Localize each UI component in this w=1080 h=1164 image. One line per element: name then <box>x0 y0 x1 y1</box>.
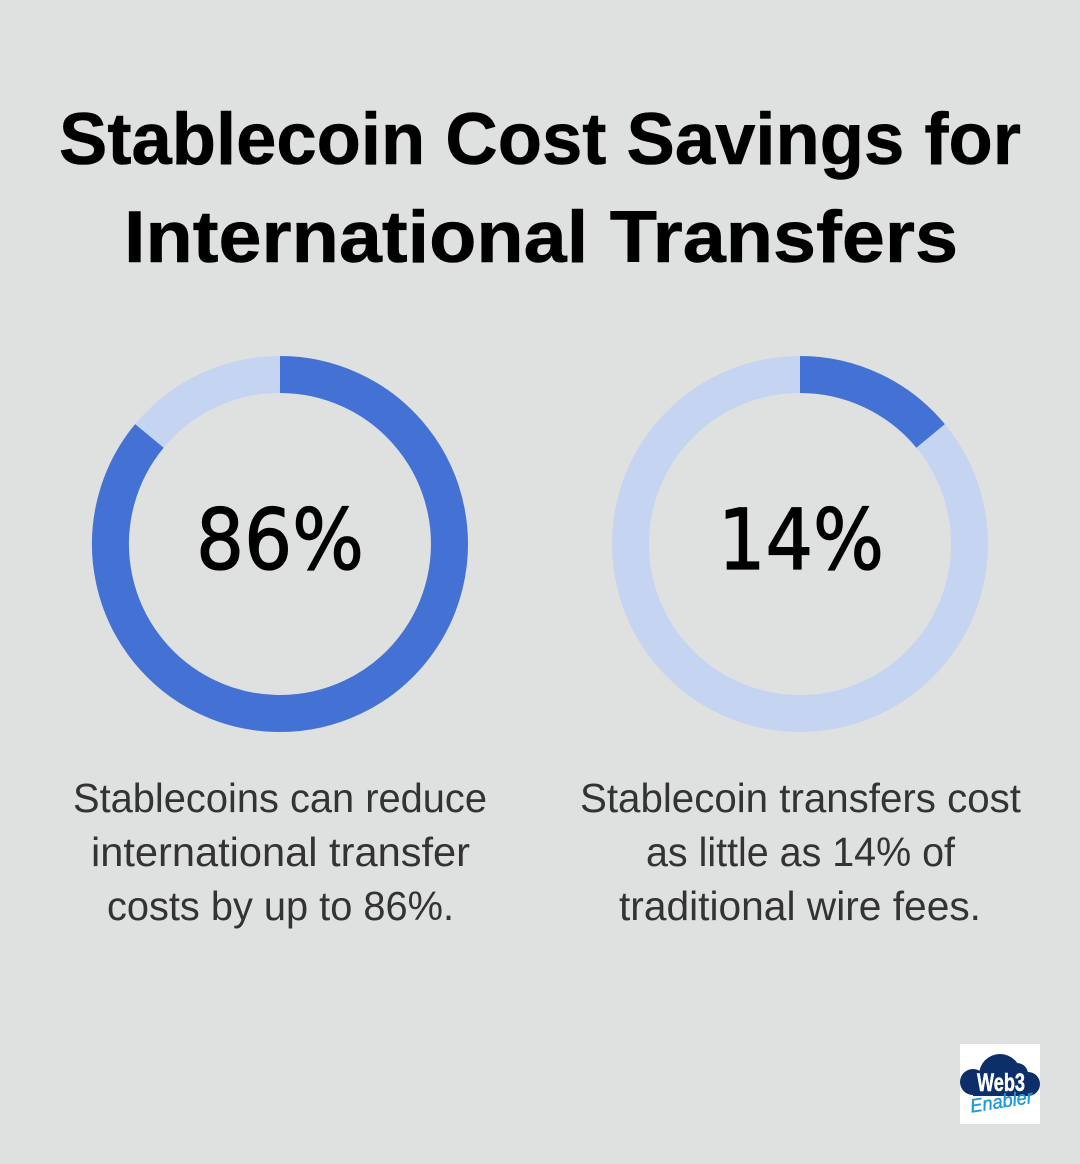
description: 86%: international transfer <box>91 829 470 875</box>
logo: Web3 Enabler: Enabler <box>969 1087 1035 1118</box>
description: 86% <box>73 775 487 929</box>
logo: Web3 Enabler: Web3 <box>977 1069 1025 1097</box>
logo: Web3 Enabler <box>960 1044 1040 1124</box>
description: 14%: as little as 14% of <box>646 829 956 875</box>
donut chart: 14% <box>630 374 970 714</box>
description: 14%: Stablecoin transfers cost <box>580 775 1022 821</box>
donut chart: 86% <box>110 374 449 714</box>
description: 14% <box>580 775 1022 929</box>
panel: 14% of wire fees <box>580 374 1022 929</box>
value: 14%: 14% <box>718 491 884 589</box>
description: 14%: traditional wire fees. <box>619 883 981 929</box>
icon: cloud <box>960 1054 1040 1096</box>
description: 86%: costs by up to 86%. <box>107 883 454 929</box>
title <box>59 99 1021 278</box>
title: International Transfers <box>124 197 958 278</box>
value: 86%: 86% <box>196 491 364 589</box>
title: Stablecoin Cost Savings for <box>59 99 1021 180</box>
description: 86%: Stablecoins can reduce <box>73 775 487 821</box>
panel: 86% reduction <box>73 374 487 929</box>
